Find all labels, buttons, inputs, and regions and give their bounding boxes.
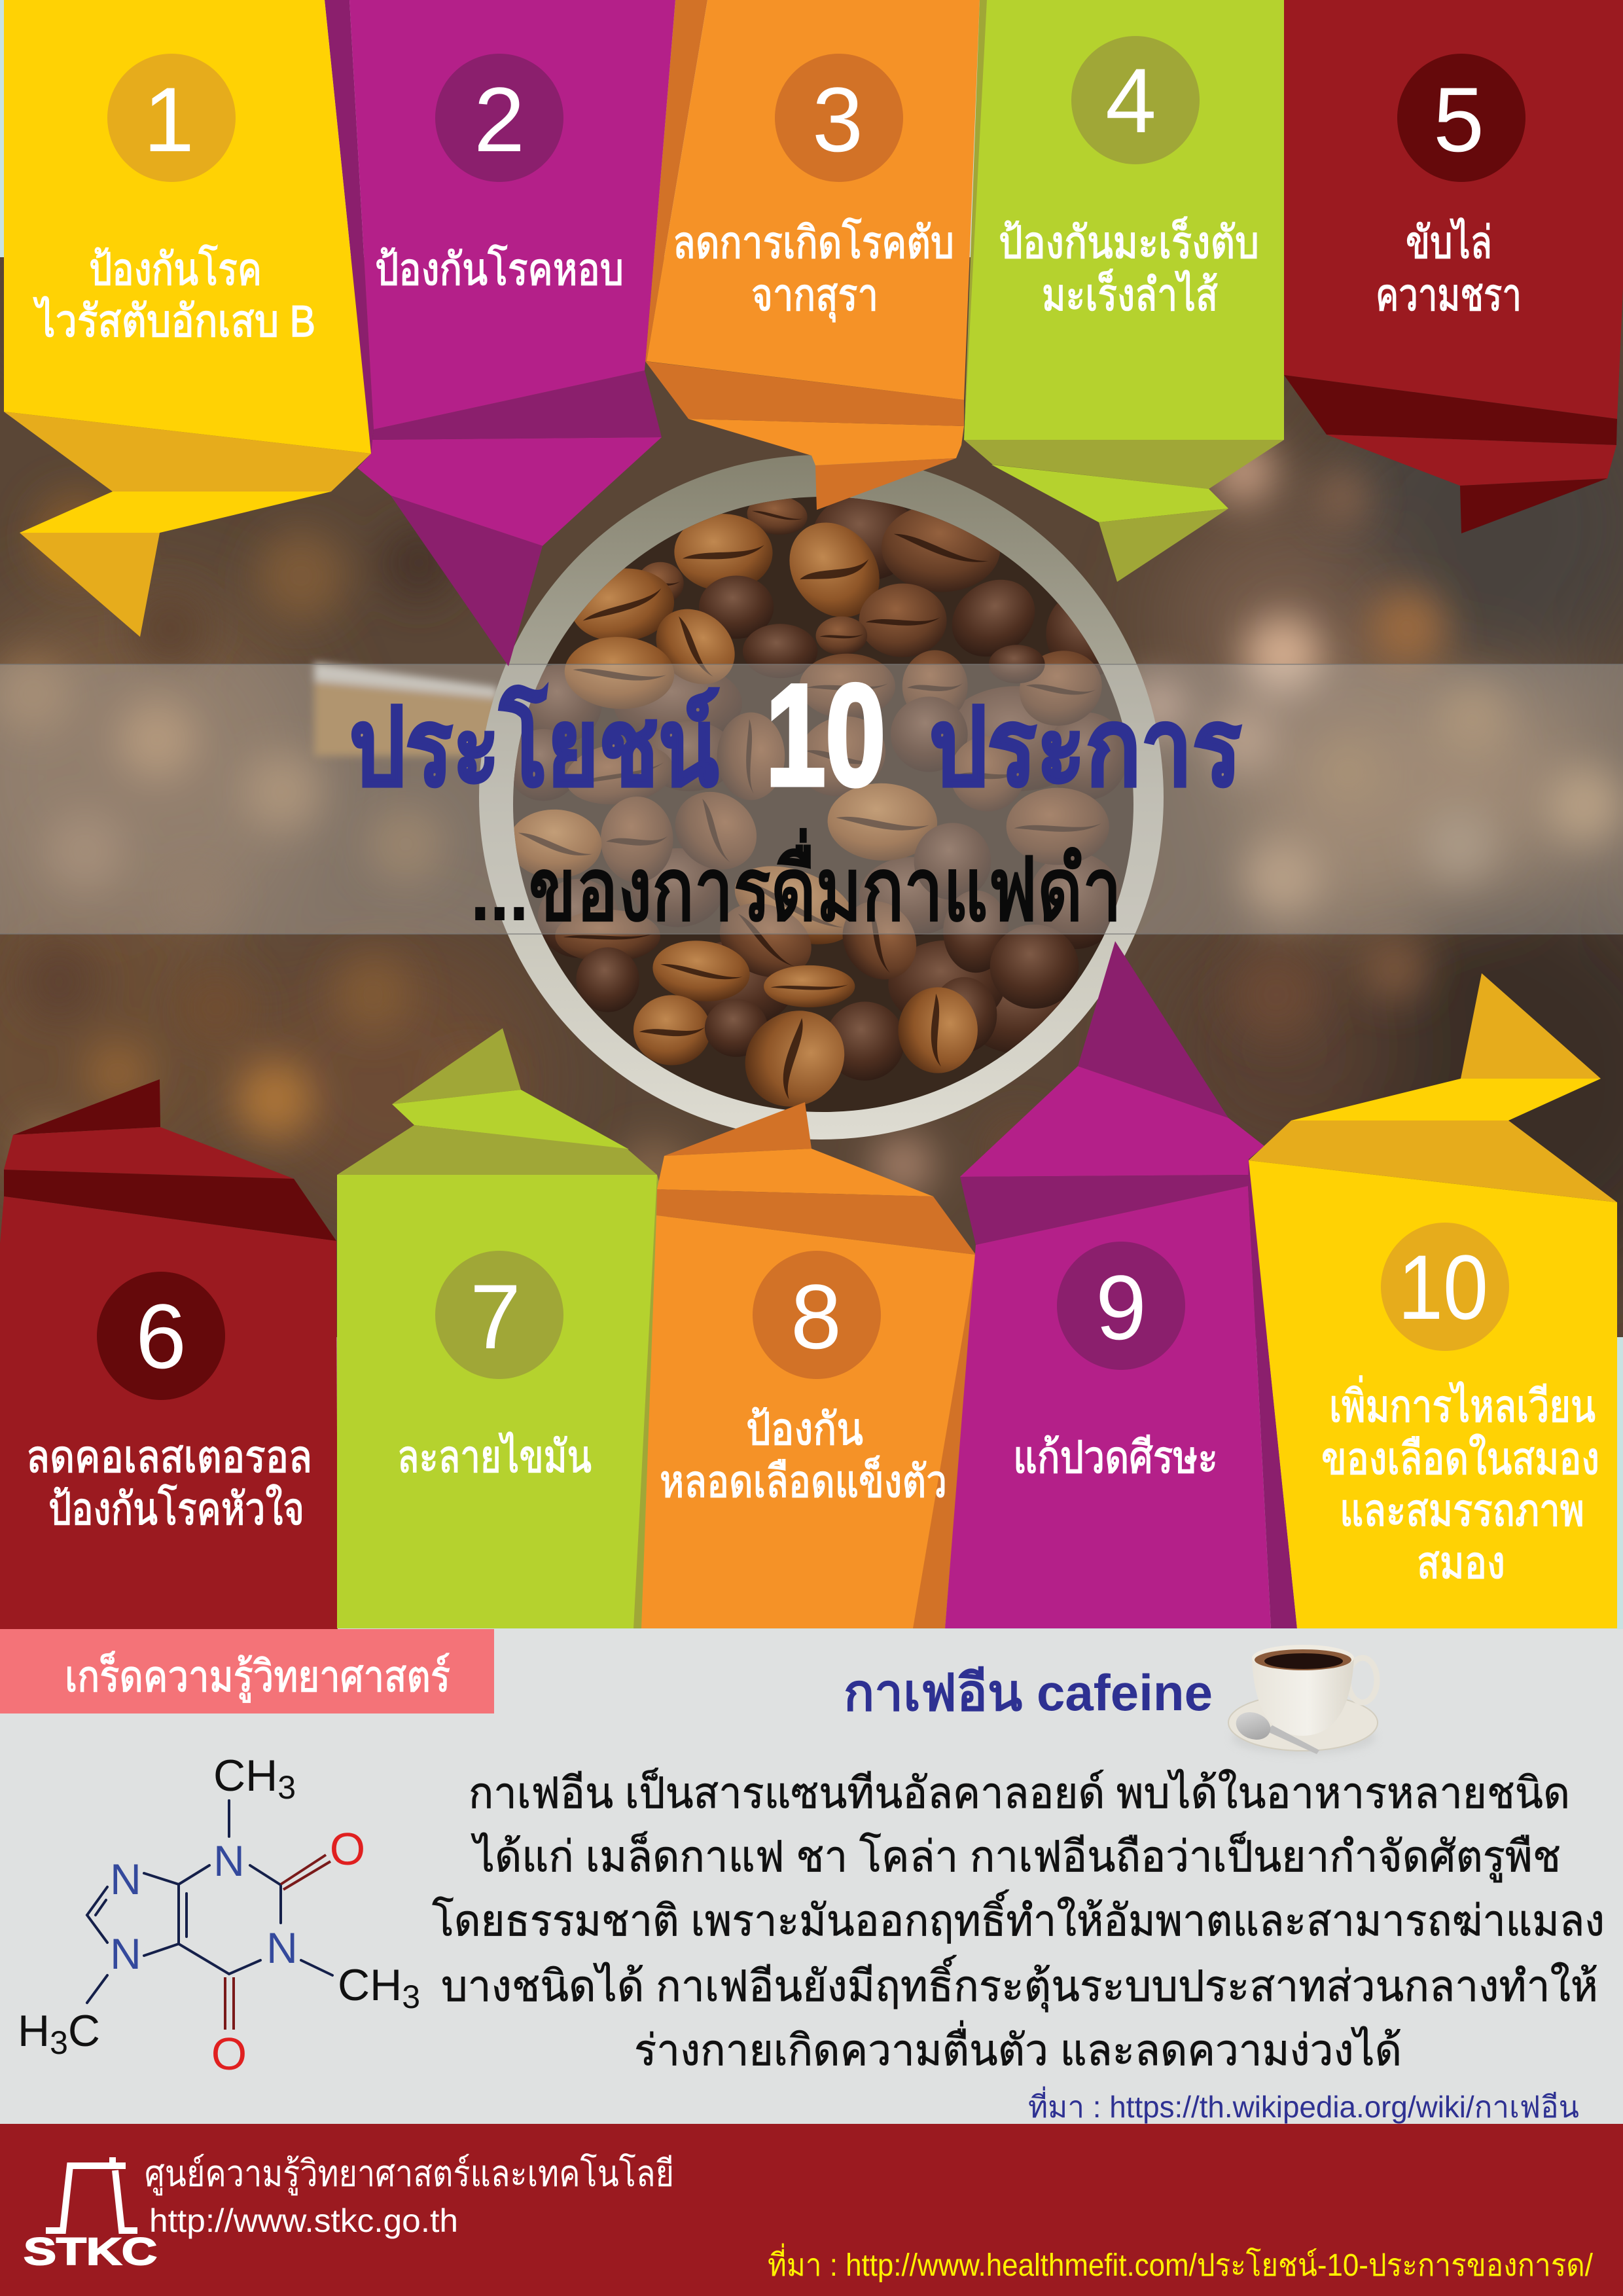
panel: benefit 5: ขับไล่: [1406, 217, 1492, 268]
panel: benefit 2: 2: [474, 68, 525, 171]
chart: caffeine molecule: O: [211, 2028, 247, 2079]
chart: caffeine molecule: N: [213, 1837, 245, 1885]
chart: caffeine molecule: N: [110, 1929, 141, 1978]
coffee beans: [493, 490, 1128, 1113]
panel: benefit 9: 9: [1096, 1256, 1147, 1359]
chart: caffeine molecule: CH: [338, 1960, 402, 2010]
source: wikipedia: ที่มา : https://th.wikipedia.org/wiki/กาเฟอีน: [1028, 2086, 1579, 2124]
icon: STKC logo: [24, 2157, 157, 2273]
body text: ได้แก่ เมล็ดกาแฟ ชา โคล่า กาเฟอีนถือว่าเป็นยากำจัดศัตรูพืช: [471, 1831, 1561, 1883]
title: ประการ: [929, 687, 1241, 808]
panel: benefit 10: [1249, 973, 1617, 1628]
icon: STKC logo: STKC: [24, 2231, 157, 2273]
body text: บางชนิดได้ กาเฟอีนยังมีฤทธิ์กระตุ้นระบบประสาทส่วนกลางทำให้: [441, 1955, 1598, 2013]
panel: benefit 8: ป้องกัน: [746, 1405, 863, 1454]
icon: coffee cup: [1228, 1645, 1378, 1755]
heading tag: เกร็ดความรู้วิทยาศาสตร์: [65, 1651, 450, 1703]
chart: caffeine molecule: N: [110, 1855, 141, 1903]
title: ประโยชน์: [349, 685, 719, 808]
panel: benefit 5: 5: [1433, 68, 1484, 171]
panel: benefit 3: 3: [812, 68, 863, 171]
chart: caffeine molecule: O: [330, 1823, 365, 1874]
panel: benefit 9: [945, 941, 1297, 1628]
panel: benefit 2: ป้องกันโรคหอบ: [375, 244, 624, 295]
panel: benefit 6: 6: [135, 1285, 187, 1388]
panel: benefit 4: ป้องกันมะเร็งตับ: [999, 217, 1259, 268]
photo background: blurred coffee beans: [0, 255, 1623, 1337]
panel: benefit 7: [337, 1028, 668, 1628]
panel: benefit 8: หลอดเลือดแข็งตัว: [660, 1456, 947, 1507]
panel: benefit 2: [325, 0, 675, 666]
spoon handle blurred in background: [314, 662, 497, 756]
page edge strips: [0, 0, 1623, 1632]
chart: caffeine molecule: H: [18, 2006, 50, 2056]
body text: กาเฟอีน เป็นสารแซนทีนอัลคาลอยด์ พบได้ในอาหารหลายชนิด: [469, 1767, 1570, 1817]
panel: benefit 4: มะเร็งลำไส้: [1042, 269, 1218, 320]
panel: benefit 3: ลดการเกิดโรคตับ: [673, 217, 954, 268]
panel: benefit 8: 8: [791, 1265, 842, 1368]
panel: benefit 10: สมอง: [1417, 1538, 1505, 1588]
panel: benefit 5: ความชรา: [1376, 270, 1522, 320]
chart: caffeine molecule: C: [68, 2006, 100, 2056]
title: [349, 655, 1241, 939]
footer: [0, 2124, 1623, 2296]
body text: ร่างกายเกิดความตื่นตัว และลดความง่วงได้: [634, 2020, 1402, 2074]
panel: benefit 7: 7: [470, 1265, 521, 1368]
chart: caffeine molecule: CH: [213, 1751, 277, 1801]
title: ...ของการดื่มกาแฟดำ: [471, 827, 1122, 939]
panel: science knowledge: [0, 1629, 1623, 2124]
chart: caffeine molecule: 3: [277, 1769, 296, 1806]
chart: caffeine molecule: N: [266, 1924, 298, 1972]
panel: benefit 7: ละลายไขมัน: [397, 1431, 592, 1482]
chart: caffeine molecule: [18, 1751, 420, 2079]
panel: benefit 4: [964, 0, 1284, 582]
panel: benefit 8: [641, 1102, 976, 1628]
panel: benefit 6: ลดคอเลสเตอรอล: [26, 1432, 312, 1482]
chart: caffeine molecule: 3: [402, 1979, 420, 2015]
panel: benefit 10: 10: [1398, 1236, 1488, 1338]
caffeine heading: กาเฟอีน cafeine: [844, 1664, 1213, 1721]
title: 10: [766, 655, 885, 816]
panel: benefit 9: แก้ปวดศีรษะ: [1013, 1433, 1218, 1482]
panel: benefit 1: ป้องกันโรค: [89, 244, 262, 295]
panel: benefit 6: ป้องกันโรคหัวใจ: [48, 1484, 304, 1534]
panel: benefit 1: [4, 0, 371, 637]
panel: benefit 1: 1: [143, 68, 194, 171]
panel: benefit 5: [1284, 0, 1623, 533]
coffee cup with beans: [479, 455, 1164, 1139]
panel: benefit 3: [645, 0, 980, 510]
panel: benefit 1: ไวรัสตับอักเสบ B: [33, 296, 315, 346]
chart: caffeine molecule: 3: [50, 2024, 68, 2061]
body text: [432, 1767, 1605, 2074]
heading tag: [0, 1629, 494, 1713]
organisation name: ศูนย์ความรู้วิทยาศาสตร์และเทคโนโลยี: [145, 2153, 674, 2196]
panel: benefit 4: 4: [1105, 49, 1156, 152]
panel: benefit 3: จากสุรา: [751, 270, 878, 322]
title band: [0, 664, 1623, 935]
panel: benefit 6: [0, 1079, 338, 1629]
website: http://www.stkc.go.th: [149, 2202, 458, 2239]
